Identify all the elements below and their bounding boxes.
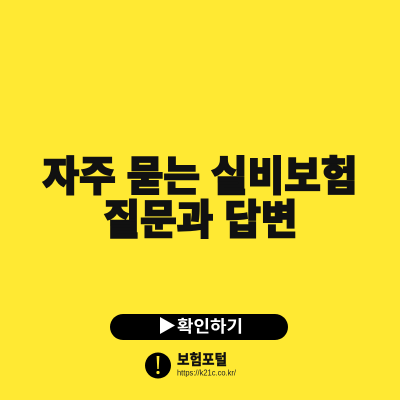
logo: 보험포털 [145,352,237,378]
brand name: 보험포털 [177,352,227,369]
title line 1: 자주 묻는 실비보험 [42,154,358,200]
button label: 확인하기 [177,317,243,336]
url: https://k21c.co.kr/ [177,368,237,378]
button: 확인하기 [110,314,288,340]
icon: play triangle [160,317,175,334]
button background [110,314,288,340]
title [42,154,358,243]
icon: exclamation badge [145,352,171,378]
title line 2: 질문과 답변 [104,197,298,243]
